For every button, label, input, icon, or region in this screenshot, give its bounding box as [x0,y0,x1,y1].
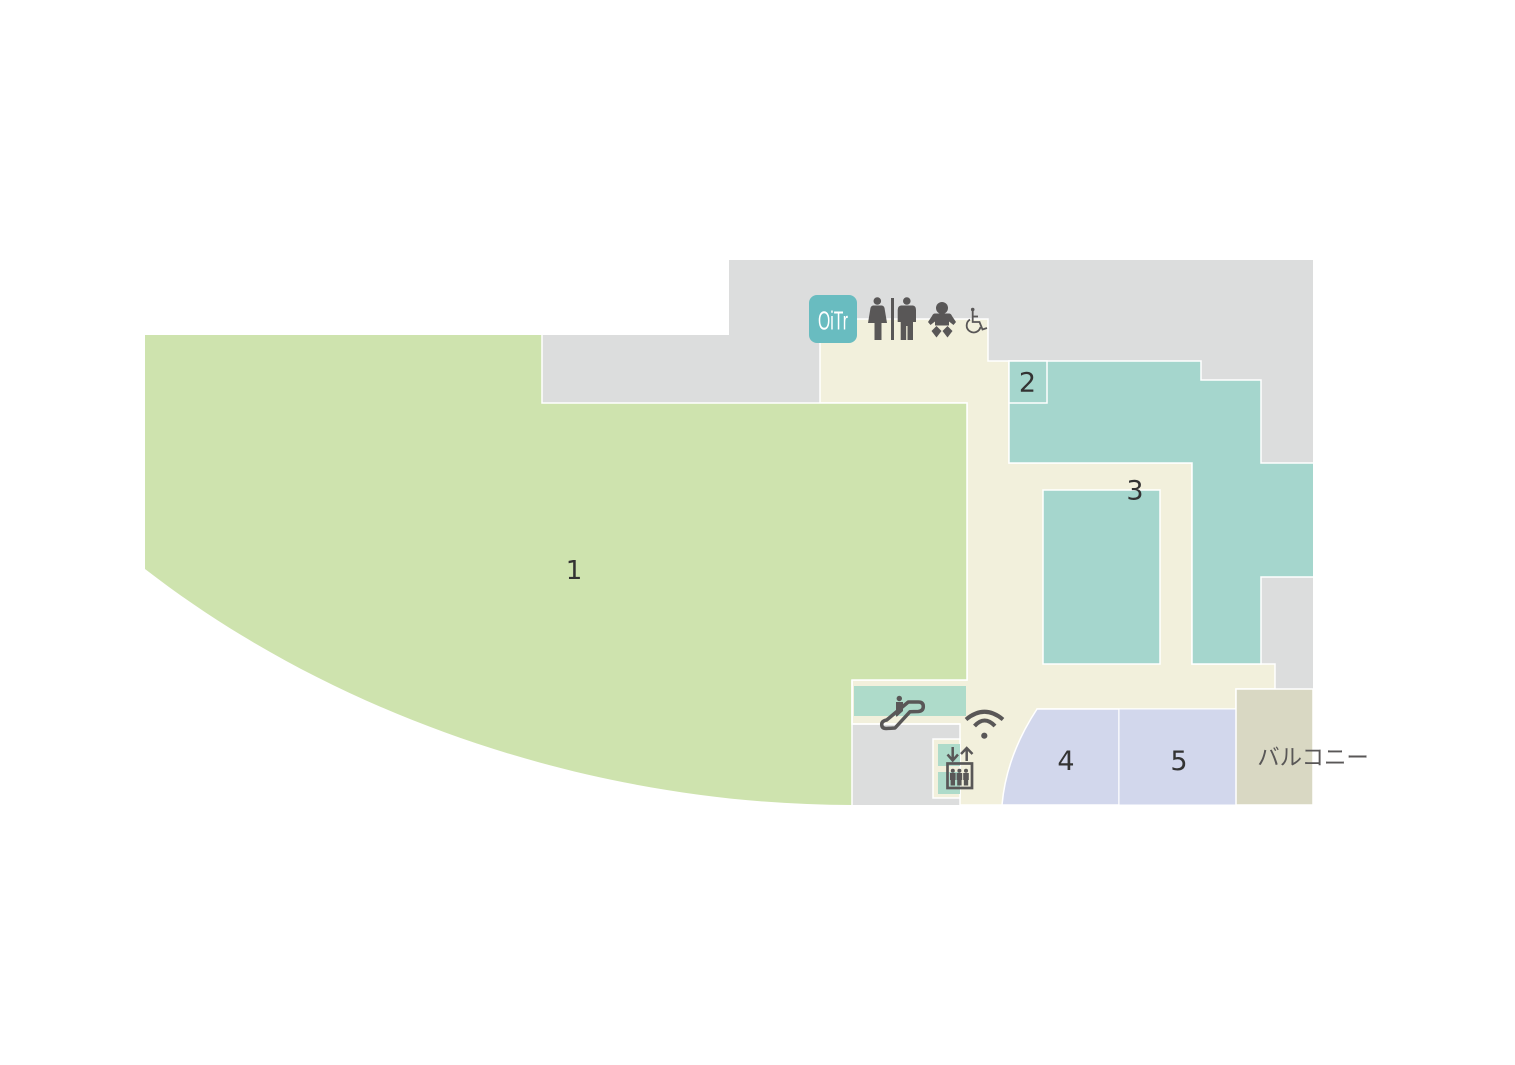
icon: escalator [882,696,923,728]
store 5 [1119,709,1236,805]
icon: restrooms [868,297,916,340]
store 1 outline [542,335,967,805]
store 1 [145,335,967,805]
icon: elevator [948,747,972,788]
lift lobby [933,739,960,798]
label 4: 4 [1057,746,1075,777]
store 3 inner block [1043,490,1160,664]
label 1: 1 [566,556,582,586]
balcony [1236,689,1313,805]
icon: OiTr: OiTr [818,306,848,336]
label 3: 3 [1126,476,1144,506]
store 2 [1009,361,1047,403]
icon: wifi [966,712,1003,739]
store 4 [1002,709,1119,805]
label 2: 2 [1019,368,1036,398]
icon: baby care [928,302,956,338]
bottom and right trim [840,680,1320,811]
escalator well [854,686,966,716]
corridor [820,319,1275,805]
white divider [852,680,960,724]
label 5: 5 [1170,746,1188,777]
balcony label: バルコニー [1257,745,1369,770]
store 3 [1009,361,1313,664]
icon: wheelchair [967,308,987,332]
store 3 outline [1009,361,1313,664]
back-of-house grey areas [542,260,1313,805]
icon: OiTr [809,295,857,343]
